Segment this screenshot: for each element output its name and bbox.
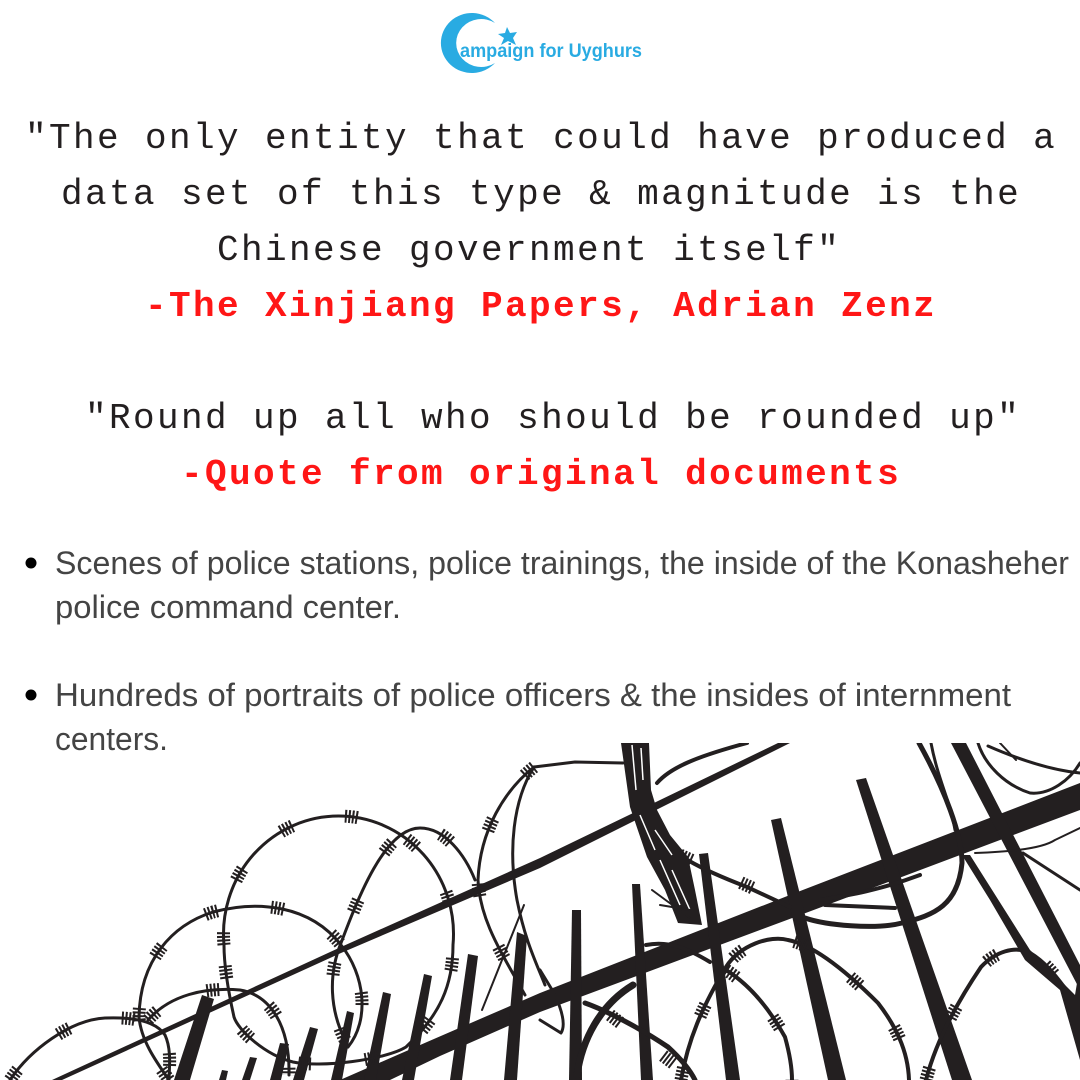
quote: the only entity: data set of this type & magnitude is the bbox=[61, 174, 1021, 215]
attribution: The Xinjiang Papers: -The Xinjiang Papers, Adrian Zenz bbox=[145, 286, 937, 327]
bullet: police stations: police command center. bbox=[55, 589, 401, 625]
logo: Campaign for Uyghurs: ampaign for Uyghurs bbox=[460, 41, 642, 62]
bullet: police stations: Scenes of police stations, police trainings, the inside of the Konasheher bbox=[55, 545, 1069, 581]
bullet: portraits of police officers: centers. bbox=[55, 721, 168, 757]
illustration: barbed wire fence silhouette bbox=[10, 743, 1080, 1080]
quote: round up: "Round up all who should be rounded up" bbox=[85, 398, 1021, 439]
logo: Campaign for Uyghurs bbox=[441, 13, 642, 73]
quote: the only entity bbox=[25, 118, 1057, 271]
fence rails bbox=[52, 743, 1080, 1080]
razor wire coils bbox=[10, 743, 1080, 1080]
bullet: portraits of police officers: Hundreds of portraits of police officers & the insides of internment bbox=[55, 677, 1011, 713]
bullet: portraits of police officers bbox=[26, 677, 1011, 757]
bullet: police stations bbox=[26, 545, 1069, 625]
quote: the only entity: "The only entity that could have produced a bbox=[25, 118, 1057, 159]
quote: the only entity: Chinese government itself" bbox=[217, 230, 841, 271]
fence posts bbox=[174, 743, 1080, 1080]
attribution: original documents: -Quote from original documents bbox=[181, 454, 901, 495]
